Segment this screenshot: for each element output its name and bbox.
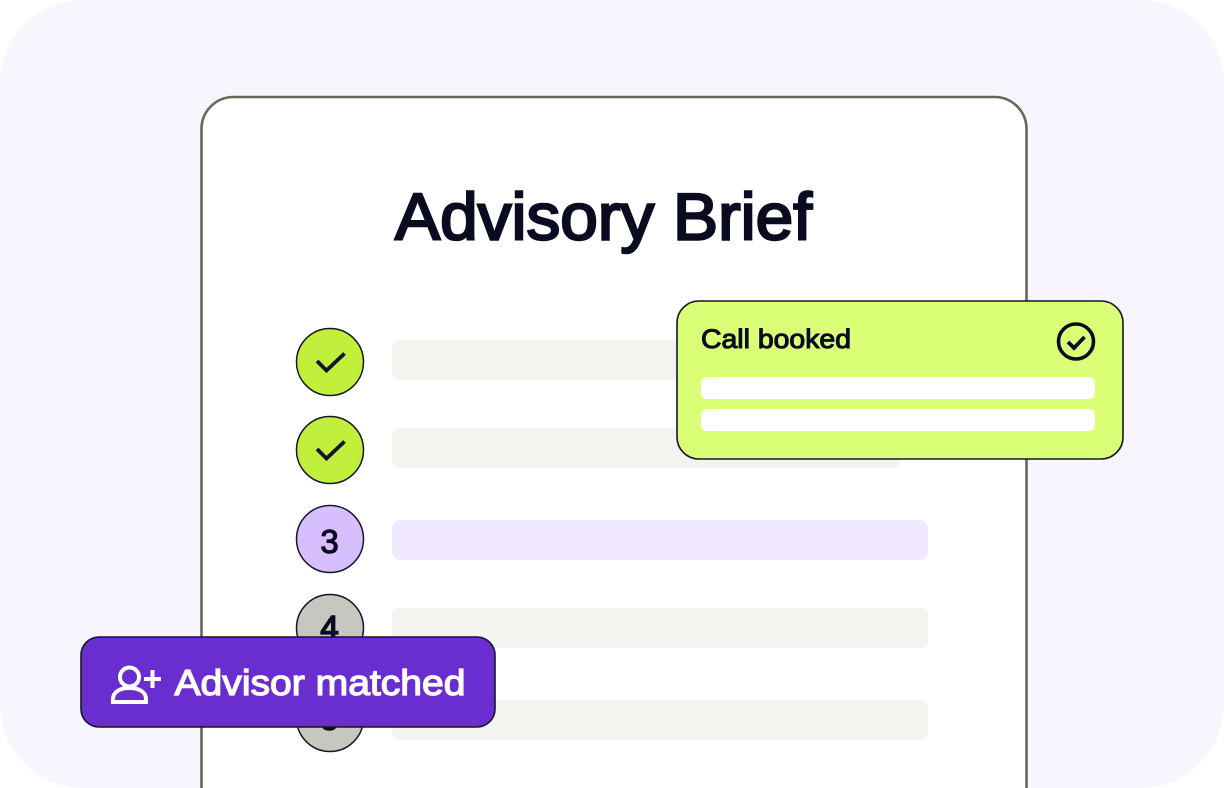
list row 2 bar xyxy=(392,428,900,468)
callout: Call booked xyxy=(677,301,1123,459)
callout placeholder line 2 xyxy=(701,409,1095,431)
step 1 icon: completed check xyxy=(296,328,364,396)
step 4 icon: number 4 xyxy=(296,594,364,662)
step 3 icon: number 3: 3 xyxy=(320,523,339,560)
heading: Advisory Brief: Advisory Brief xyxy=(395,180,813,254)
step 2 icon: completed check xyxy=(296,416,364,484)
list row 3 bar xyxy=(392,520,928,560)
callout title: Call booked xyxy=(701,324,851,354)
callout placeholder line 1 xyxy=(701,377,1095,399)
icon: circled check xyxy=(1058,324,1094,359)
step 3 icon: number 3 xyxy=(296,506,364,572)
icon: add person xyxy=(113,668,161,702)
step 4 icon: number 4: 4 xyxy=(320,609,339,646)
step 5 icon: number 5 xyxy=(296,684,364,752)
list row 4 bar xyxy=(392,608,928,648)
list row 5 bar xyxy=(392,700,928,740)
badge: Advisor matched xyxy=(81,637,495,727)
step 5 icon: number 5: 5 xyxy=(320,700,339,737)
list row 1 bar xyxy=(392,340,900,380)
badge label: Advisor matched xyxy=(174,662,466,703)
panel: document card xyxy=(202,97,1026,788)
